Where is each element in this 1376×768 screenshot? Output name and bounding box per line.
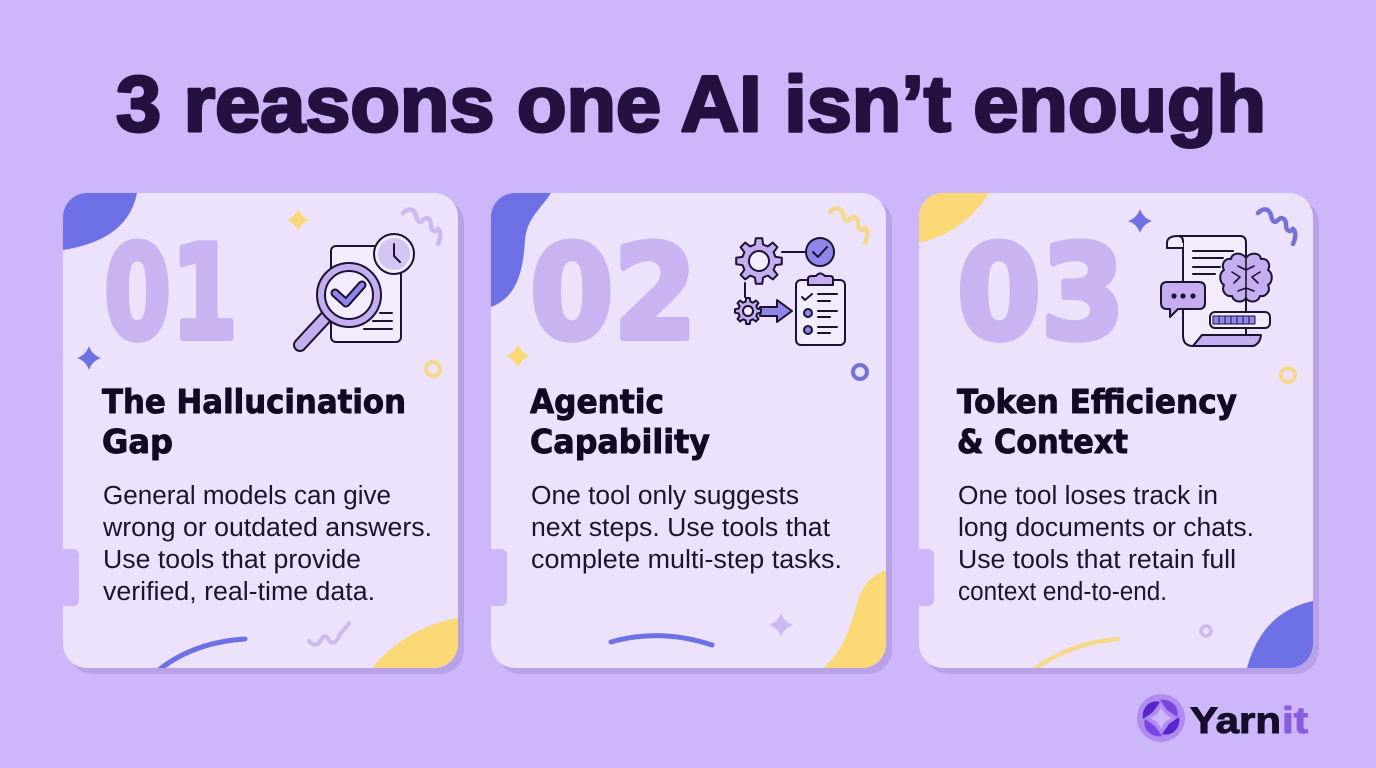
body text: Use tools that provide [103,546,361,574]
heading: Token Efficiency [957,382,1237,421]
body text: Use tools that retain full [958,546,1236,574]
body text: One tool only suggests [531,482,799,510]
heading: The Hallucination [102,382,406,421]
icon: scroll, brain, chat and progress bar [1161,236,1272,346]
body text: next steps. Use tools that [531,514,830,542]
body text: General models can give [103,482,391,510]
number 02: 02 [530,217,697,369]
body text [531,482,842,574]
number 03: 03 [957,217,1125,369]
heading: Gap [102,422,173,461]
panel: 01 The Hallucination Gap [60,193,464,674]
heading [102,382,406,461]
number 01: 01 [104,217,238,369]
icon: gears and clipboard [735,238,845,345]
body text: long documents or chats. [958,514,1254,542]
heading [957,382,1237,461]
body text [958,482,1254,606]
body text: complete multi-step tasks. [531,546,842,574]
body text [102,482,432,606]
body text: One tool loses track in [958,482,1218,510]
logo: Yarnit [1137,694,1308,742]
title: 3 reasons one AI isn’t enough [116,59,1266,148]
logo: Yarnit: Yarn [1190,700,1281,741]
body text: wrong or outdated answers. [102,514,432,542]
heading: Capability [530,422,710,461]
icon: magnifier over document with clock [300,234,414,345]
panel: 02 Agentic Capability [488,193,892,674]
logo: Yarnit: it [1282,700,1308,741]
heading: Agentic [530,382,664,421]
panel: 03 Token Efficiency & Context [916,193,1319,674]
body text: context end-to-end. [958,578,1167,606]
heading: & Context [957,422,1128,461]
body text: verified, real-time data. [103,578,375,606]
heading [530,382,710,461]
